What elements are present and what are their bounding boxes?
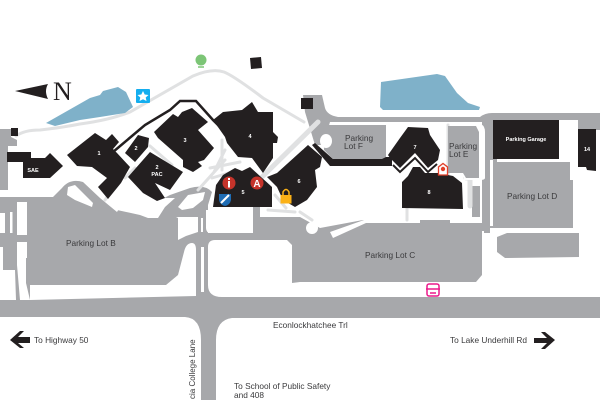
- building 3: [154, 108, 214, 172]
- building 2 PAC: [128, 152, 183, 201]
- covered walkway: [113, 101, 230, 152]
- icon: security shield: [219, 194, 231, 206]
- parking garage: [493, 120, 559, 159]
- building 14: 14: [584, 147, 591, 153]
- lake: east pond: [380, 74, 480, 110]
- building 8: 8: [427, 190, 431, 196]
- parking lot D: Parking Lot D: [507, 191, 557, 201]
- building 8: [402, 167, 463, 209]
- pedestrian paths: [16, 71, 470, 220]
- lot surrounds: [450, 123, 485, 180]
- building SAE: SAE: [27, 168, 39, 174]
- icon: health marker: [438, 164, 448, 175]
- building 4: 4: [248, 134, 252, 140]
- north arrow: [15, 77, 72, 106]
- building 4: [213, 102, 278, 173]
- building 7: 7: [413, 145, 417, 151]
- road label: Econlockhatchee Trl: Econlockhatchee Trl: [273, 320, 348, 330]
- icon: lock: [280, 190, 292, 204]
- building 7: [388, 127, 440, 172]
- icon: bus stop: [426, 284, 440, 296]
- building 1: 1: [97, 151, 101, 157]
- icon: admissions A: A: [253, 179, 261, 190]
- building SAE: [7, 152, 63, 178]
- north arrow: N: [53, 77, 72, 106]
- walkway to building 7: [312, 143, 392, 166]
- road network: [0, 95, 600, 400]
- icon: star: [136, 89, 150, 103]
- building 14: [578, 129, 596, 171]
- icon: tree: [196, 54, 206, 67]
- building 5: [213, 167, 272, 207]
- building 6: [267, 145, 322, 207]
- icon: information: [222, 176, 236, 190]
- lake: west pond: [46, 87, 133, 126]
- building 2 PAC: PAC: [151, 172, 163, 178]
- arrow: west: [10, 331, 30, 348]
- building 2: [125, 135, 149, 162]
- arrow: east: [534, 332, 555, 349]
- building 2: 2: [134, 146, 138, 152]
- label: To School of Public Safety and 408: and 408: [234, 390, 264, 400]
- parking lot B label: Parking Lot B: [66, 238, 116, 248]
- parking lot D: [497, 162, 579, 258]
- parking garage: Parking Garage: [506, 137, 546, 143]
- label: To Lake Underhill Rd: To Lake Underhill Rd: [450, 335, 527, 345]
- label: To Highway 50: To Highway 50: [34, 335, 89, 345]
- small building squares: [11, 57, 313, 136]
- road label: Valencia College Lane, cropped by the frame as in the reference: cia College Lane: [188, 339, 197, 399]
- building 3: 3: [183, 138, 187, 144]
- label: To School of Public Safety and 408: To School of Public Safety: [234, 381, 330, 391]
- parking lot E: Parking: [449, 141, 478, 151]
- building 1: [67, 133, 130, 199]
- parking lot E: [448, 126, 479, 178]
- parking lot F: [320, 125, 386, 159]
- parking lot C label: Parking Lot C: [365, 250, 415, 260]
- building 2 PAC: 2: [155, 165, 159, 171]
- building 6: 6: [297, 179, 301, 185]
- parking lot E: Lot E: [449, 149, 469, 159]
- building 5: 5: [241, 190, 245, 196]
- parking lot F: Parking: [345, 133, 374, 143]
- parking lot F: Lot F: [344, 141, 363, 151]
